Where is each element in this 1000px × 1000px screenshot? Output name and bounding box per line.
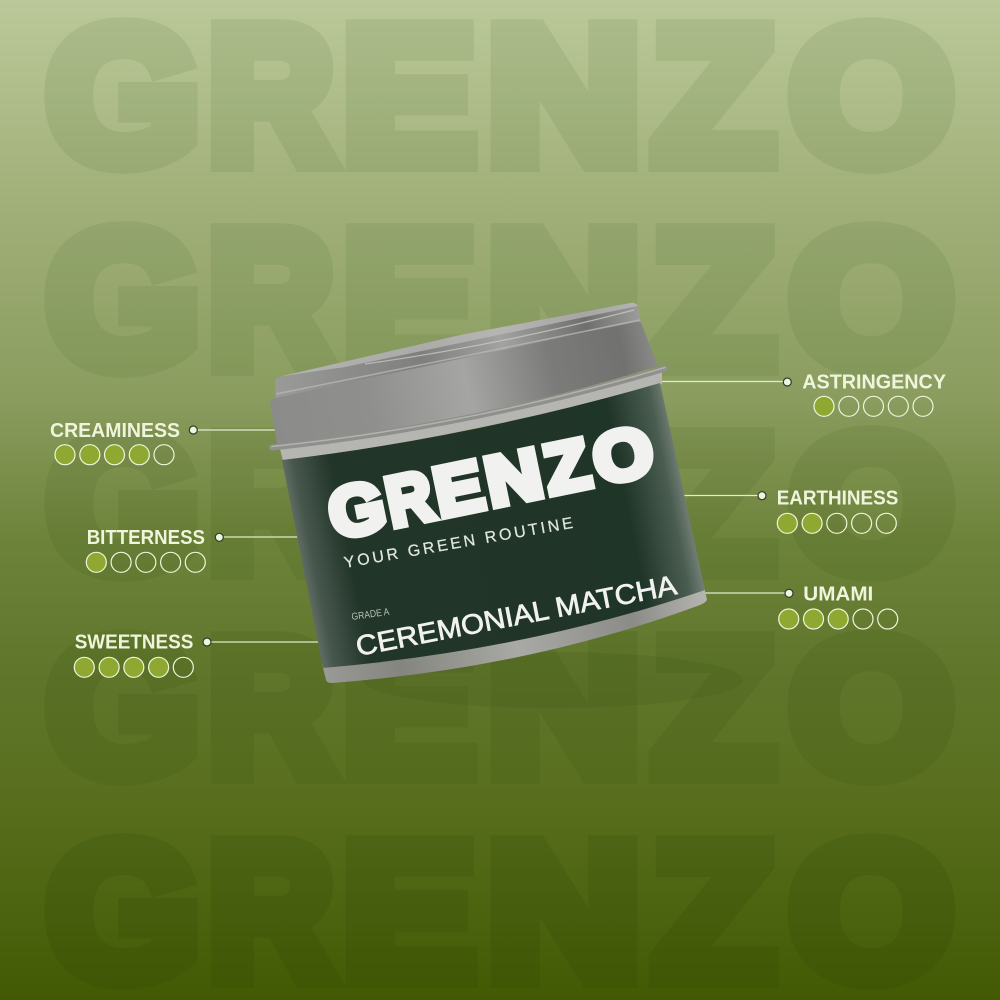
watermark word row 4: E (343, 600, 475, 815)
rating: astringency (783, 372, 947, 416)
watermark word row 4: O (790, 599, 953, 815)
rating: earthiness: EARTHINESS (777, 488, 898, 510)
brand wordmark: G (322, 466, 392, 553)
watermark word row 2: Z (653, 192, 774, 407)
brand wordmark: E (427, 447, 490, 533)
tin neck (280, 369, 662, 461)
watermark word row 2: G (46, 193, 200, 408)
tin rim (272, 368, 665, 448)
brand wordmark (322, 410, 660, 554)
watermark word row 3: R (208, 396, 334, 611)
watermark word row 4: Z (653, 600, 774, 815)
watermark word row 4 (46, 599, 953, 816)
watermark word row 2: O (790, 191, 953, 407)
brand wordmark: N (478, 433, 549, 522)
connector lines (193, 382, 789, 642)
watermark word row 3: O (790, 395, 953, 611)
watermark word row 2 (46, 191, 953, 408)
watermark word row 5 (46, 803, 953, 1000)
rating: umami (779, 583, 898, 629)
rating: creaminess: CREAMINESS (50, 420, 180, 442)
tin dark green label (282, 383, 705, 668)
tin lid top plate (275, 303, 641, 400)
rating: umami: UMAMI (803, 583, 873, 605)
tagline: YOUR GREEN ROUTINE (343, 515, 574, 572)
watermark word row 3: E (343, 396, 475, 611)
brand wordmark: R (380, 457, 440, 543)
product name: CEREMONIAL MATCHA (353, 569, 679, 662)
watermark word row 3: Z (653, 396, 774, 611)
grade text: GRADE A (351, 607, 390, 623)
watermark word row 4: G (46, 601, 200, 816)
watermark word row 2: N (487, 191, 641, 407)
watermark word row 2: E (343, 192, 475, 407)
rating: sweetness (74, 632, 211, 677)
matcha tin (270, 303, 707, 683)
brand wordmark: Z (538, 425, 596, 510)
brand wordmark: O (586, 411, 660, 500)
rating: bitterness: BITTERNESS (87, 527, 205, 549)
rating: astringency: ASTRINGENCY (802, 372, 947, 394)
watermark word row 2: R (208, 192, 334, 407)
watermark word row 3 (46, 395, 953, 612)
rating: sweetness: SWEETNESS (75, 632, 193, 654)
rating: earthiness (758, 488, 898, 533)
watermark word row 3: N (487, 395, 641, 611)
rating: creaminess (50, 420, 197, 465)
watermark word row 3: G (46, 397, 200, 612)
watermark word row 1 (46, 0, 953, 204)
can shadow (363, 652, 743, 708)
watermark word row 4: N (487, 599, 641, 815)
tin lid band (270, 322, 658, 444)
watermark word row 4: R (208, 600, 334, 815)
rating: bitterness (86, 527, 223, 572)
tin base ring (322, 586, 707, 683)
